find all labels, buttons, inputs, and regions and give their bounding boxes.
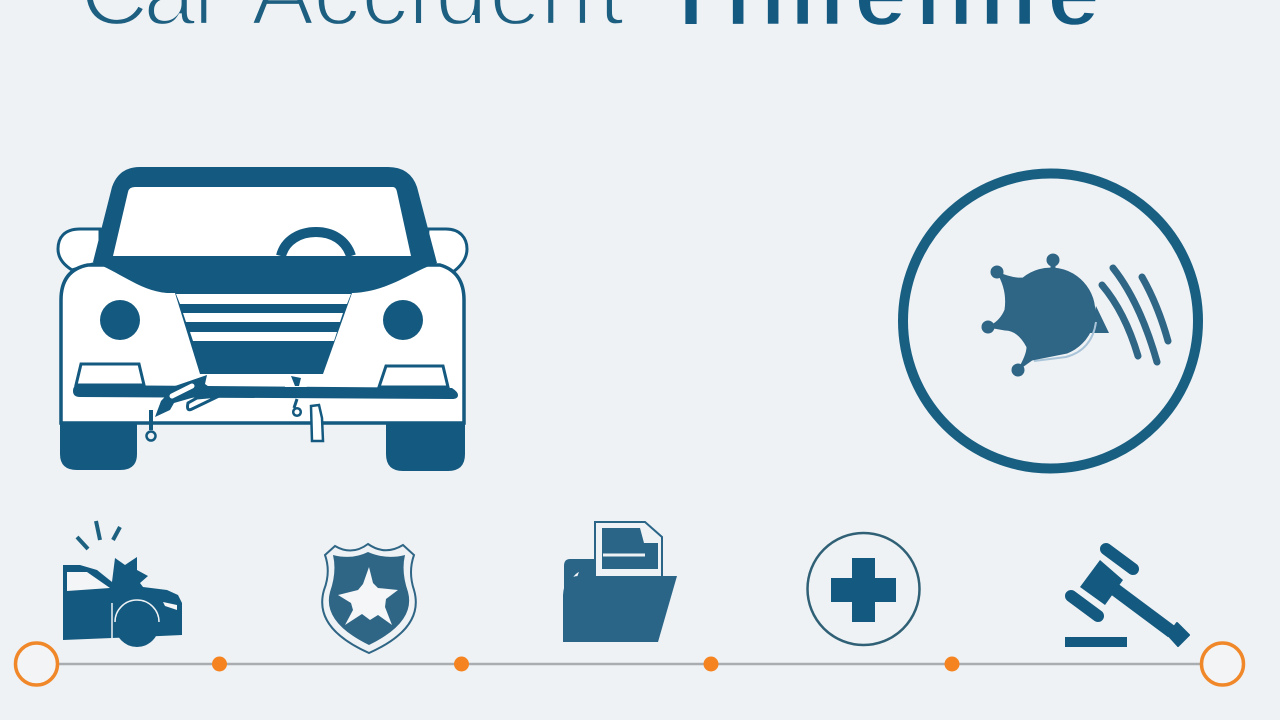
- steering wheel: [281, 232, 351, 256]
- icon: police badge: [322, 544, 416, 653]
- icon: folder with document: [563, 522, 677, 642]
- right mirror: [426, 229, 467, 272]
- icon: medical cross: [808, 533, 920, 645]
- icon: car crash: [63, 521, 182, 647]
- wheels: [60, 423, 465, 471]
- impact blob: [982, 254, 1096, 376]
- roof and hood: [93, 167, 437, 293]
- circle ring: [903, 174, 1198, 468]
- timeline line: [57, 663, 1201, 665]
- fog lights: [76, 364, 448, 387]
- bumper: [73, 385, 458, 399]
- icon: gavel: [1065, 549, 1189, 647]
- bumper damage: [146, 375, 323, 441]
- car body: [61, 265, 464, 423]
- sound waves: [1102, 268, 1168, 362]
- windshield: [113, 187, 411, 256]
- end marker: [1202, 643, 1244, 685]
- grille: [175, 293, 352, 374]
- title: [80, 0, 1100, 46]
- car front illustration: [58, 167, 467, 471]
- timeline: [16, 643, 1244, 685]
- headlights: [100, 300, 423, 340]
- start marker: [16, 643, 58, 685]
- impact icon in circle: [903, 174, 1198, 468]
- impact wedge: [1090, 306, 1109, 333]
- lower edge: [62, 422, 463, 424]
- left mirror: [58, 229, 100, 270]
- step dots: [212, 656, 960, 672]
